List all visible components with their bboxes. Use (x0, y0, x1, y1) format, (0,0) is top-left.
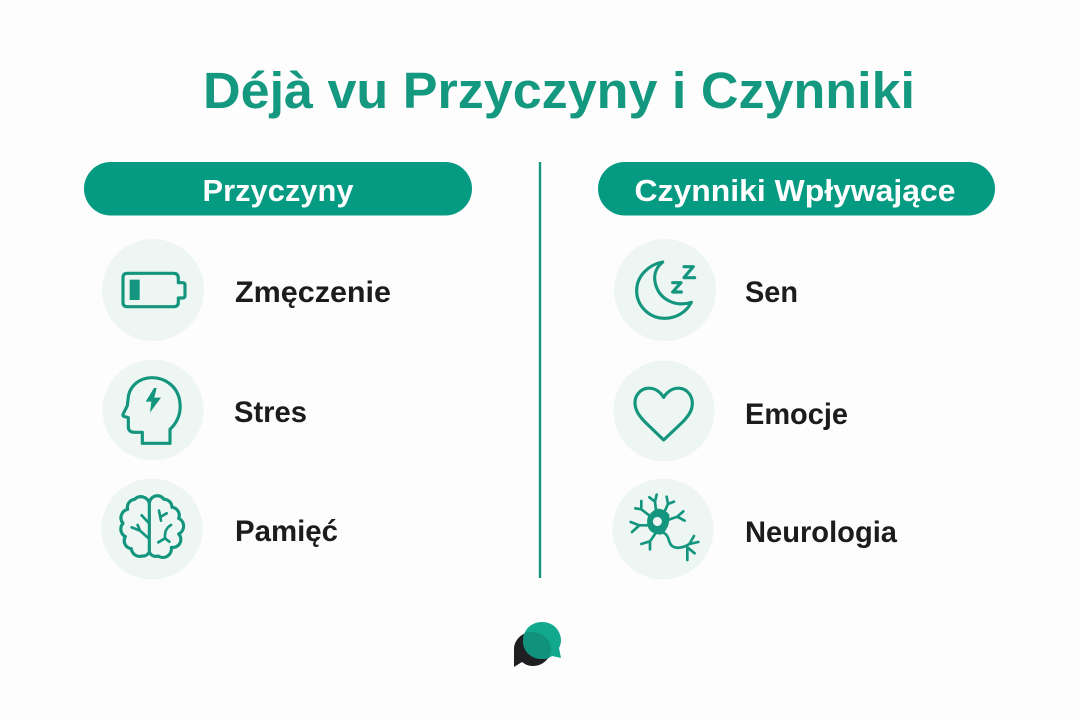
icon: moon with zz (637, 262, 695, 318)
item: Sen (614, 239, 798, 341)
heading: Czynniki Wpływające (598, 162, 995, 216)
icon: neuron (631, 495, 698, 560)
icon: brain (121, 496, 184, 557)
item: Pamięć (102, 478, 338, 580)
icon: heart (635, 388, 692, 440)
logo: speech bubbles (514, 622, 561, 667)
item: Zmęczenie (102, 239, 391, 341)
heading: Przyczyny (84, 162, 472, 216)
item: Neurologia: Neurologia (745, 516, 897, 549)
icon: head with lightning (123, 378, 180, 443)
heading: Przyczyny: Przyczyny (202, 173, 354, 208)
panel: influencing factors (598, 162, 995, 580)
item: Emocje: Emocje (745, 398, 848, 431)
panel: causes (84, 162, 472, 580)
item: Neurologia (612, 478, 897, 580)
item: Pamięć: Pamięć (235, 515, 338, 548)
item: Sen: Sen (745, 276, 798, 309)
item: Zmęczenie: Zmęczenie (235, 276, 391, 309)
heading: Czynniki Wpływające: Czynniki Wpływające (634, 173, 956, 208)
title: Déjà vu Przyczyny i Czynniki (203, 62, 915, 119)
divider (539, 162, 541, 578)
item: Stres: Stres (234, 396, 307, 429)
icon: battery (123, 273, 185, 307)
item: Emocje (614, 360, 848, 462)
item: Stres (102, 360, 307, 460)
